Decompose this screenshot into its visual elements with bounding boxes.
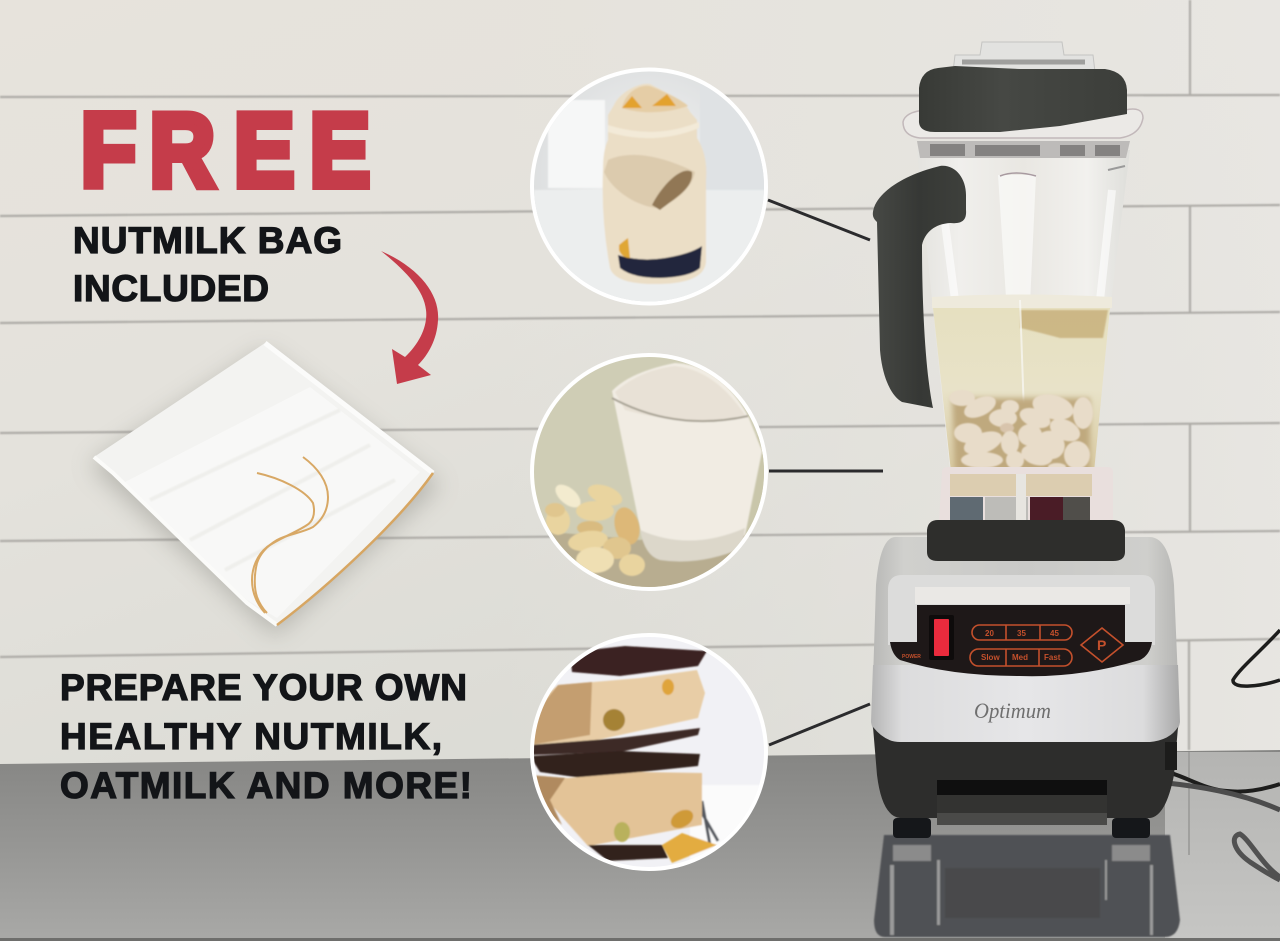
- motor base: [871, 537, 1180, 838]
- subheading: nutmilk bag included: NUTMILK BAG: [73, 220, 342, 261]
- subheading: nutmilk bag included: [73, 220, 342, 309]
- blender reflection: [874, 835, 1180, 937]
- jar base collar: [938, 467, 1113, 538]
- control panel buttons: [902, 615, 1123, 666]
- brand logo: Optimum: [974, 698, 1051, 723]
- bottom caption: HEALTHY NUTMILK,: [60, 716, 442, 757]
- control panel buttons: 20: [985, 629, 994, 638]
- control panel buttons: Fast: [1044, 653, 1061, 662]
- blender jar: [917, 150, 1130, 472]
- power cord: [1167, 630, 1280, 880]
- cashews in jar: [949, 390, 1093, 471]
- lid: [919, 42, 1127, 132]
- subheading: nutmilk bag included: INCLUDED: [73, 268, 269, 309]
- control panel buttons: Slow: [981, 653, 1000, 662]
- heading: FREE: FREE: [81, 92, 370, 208]
- photo circle: layered jar dessert: [530, 67, 768, 307]
- handle: [873, 166, 966, 408]
- jar base pad: [927, 520, 1125, 561]
- arrow: curved red pointing to bag: [381, 251, 438, 384]
- control panel buttons: 45: [1050, 629, 1059, 638]
- control panel buttons: 35: [1017, 629, 1026, 638]
- jar rim and band: [903, 109, 1143, 158]
- control panel buttons: POWER: [902, 654, 921, 660]
- countertop: [0, 750, 1280, 941]
- control panel buttons: Med: [1012, 653, 1028, 662]
- photo circle: nougat bars: [530, 633, 768, 875]
- nutmilk bag illustration: [90, 343, 440, 635]
- blender: [871, 42, 1280, 937]
- photo circle: glass of milk and cashews: [530, 353, 770, 600]
- bottom caption: OATMILK AND MORE!: [60, 765, 472, 806]
- control panel buttons: P: [1097, 637, 1106, 653]
- bottom caption: [60, 667, 472, 806]
- bottom caption: PREPARE YOUR OWN: [60, 667, 467, 708]
- connector lines: [768, 200, 883, 745]
